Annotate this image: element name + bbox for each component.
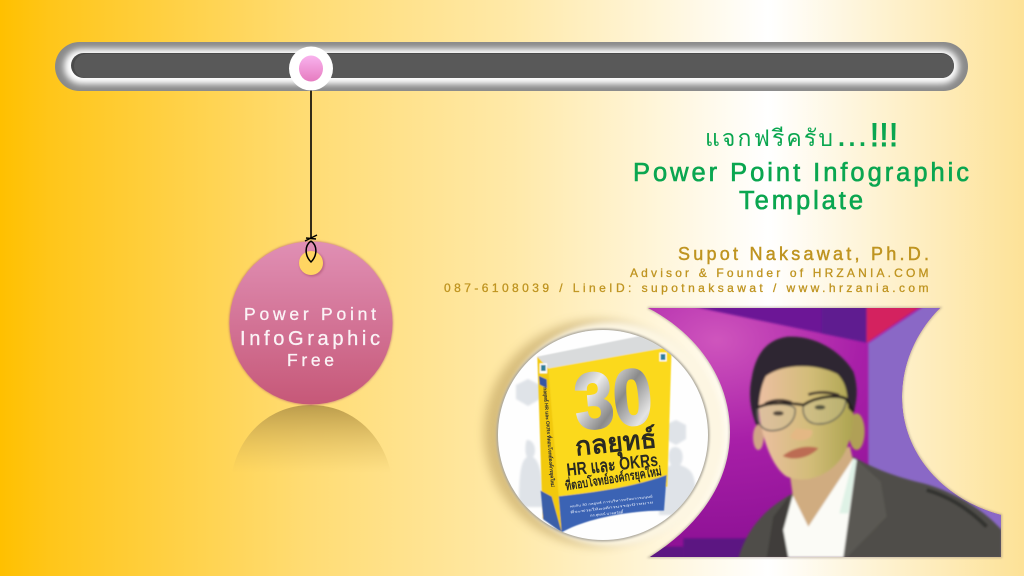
cover blurb: พบกับ 30 กลยุทธ์ การบริหารทรัพยากรมนุษย์ xyxy=(570,494,653,510)
author details: Supot Naksawat, Ph.D. xyxy=(678,244,929,264)
headline xyxy=(633,117,969,215)
title number: 30 xyxy=(571,352,656,446)
title text: HR และ OKRs xyxy=(566,450,659,480)
cover blurb: ที่จะช่วยให้องค์กรบรรลุเป้าหมาย xyxy=(570,499,654,516)
title text: ที่ตอบโจทย์องค์กรยุคใหม่ xyxy=(564,461,663,494)
neck xyxy=(788,447,853,527)
headline: Template xyxy=(739,187,863,215)
spine xyxy=(537,357,562,532)
title text xyxy=(564,423,663,494)
person xyxy=(739,337,1002,558)
hair xyxy=(750,337,857,426)
thai line: !!! xyxy=(870,117,898,153)
knot xyxy=(305,235,317,262)
thai line: แจกฟรีครับ xyxy=(705,125,833,151)
jacket xyxy=(739,457,1002,558)
tag label: InfoGraphic xyxy=(240,328,380,350)
title text: กลยุทธ์ xyxy=(573,423,658,464)
slider bar xyxy=(55,42,968,91)
cover blurb: ดร.สุพจน์ นาคสวัสดิ์ xyxy=(590,509,625,519)
author details xyxy=(444,244,929,295)
eyes and brows xyxy=(765,392,839,404)
ears xyxy=(753,425,764,450)
pages top xyxy=(537,335,672,368)
thai line: ... xyxy=(838,124,866,152)
cover blurb xyxy=(570,494,654,519)
spine text: กลยุทธ์ HR และ OKRs ที่ตอบโจทย์องค์กรยุคใหม่ xyxy=(541,387,557,487)
thai line xyxy=(705,117,898,153)
tag hole xyxy=(299,251,324,276)
tag label: Free xyxy=(287,350,334,370)
mouth xyxy=(783,447,818,459)
book circle halo xyxy=(484,320,724,546)
headline: Power Point Infographic xyxy=(633,159,969,187)
photo panel xyxy=(647,306,1003,560)
hanging tag xyxy=(229,235,393,405)
nose xyxy=(792,429,812,440)
tag label xyxy=(240,304,380,370)
book circle xyxy=(496,328,710,542)
shirt xyxy=(783,458,857,557)
glasses xyxy=(757,397,846,431)
book xyxy=(537,335,672,532)
author details: 087-6108039 / LineID: supotnaksawat / www.hrzania.com xyxy=(444,281,929,295)
blue band xyxy=(549,475,667,532)
photo backdrop xyxy=(640,307,1003,562)
front cover xyxy=(548,347,672,500)
tag label: Power Point xyxy=(244,304,376,324)
author details: Advisor & Founder of HRZANIA.COM xyxy=(630,266,928,280)
slider knob xyxy=(289,46,333,90)
face xyxy=(758,363,854,479)
backdrop figures xyxy=(516,379,695,515)
string xyxy=(310,88,312,238)
reflection of tag xyxy=(232,405,391,473)
